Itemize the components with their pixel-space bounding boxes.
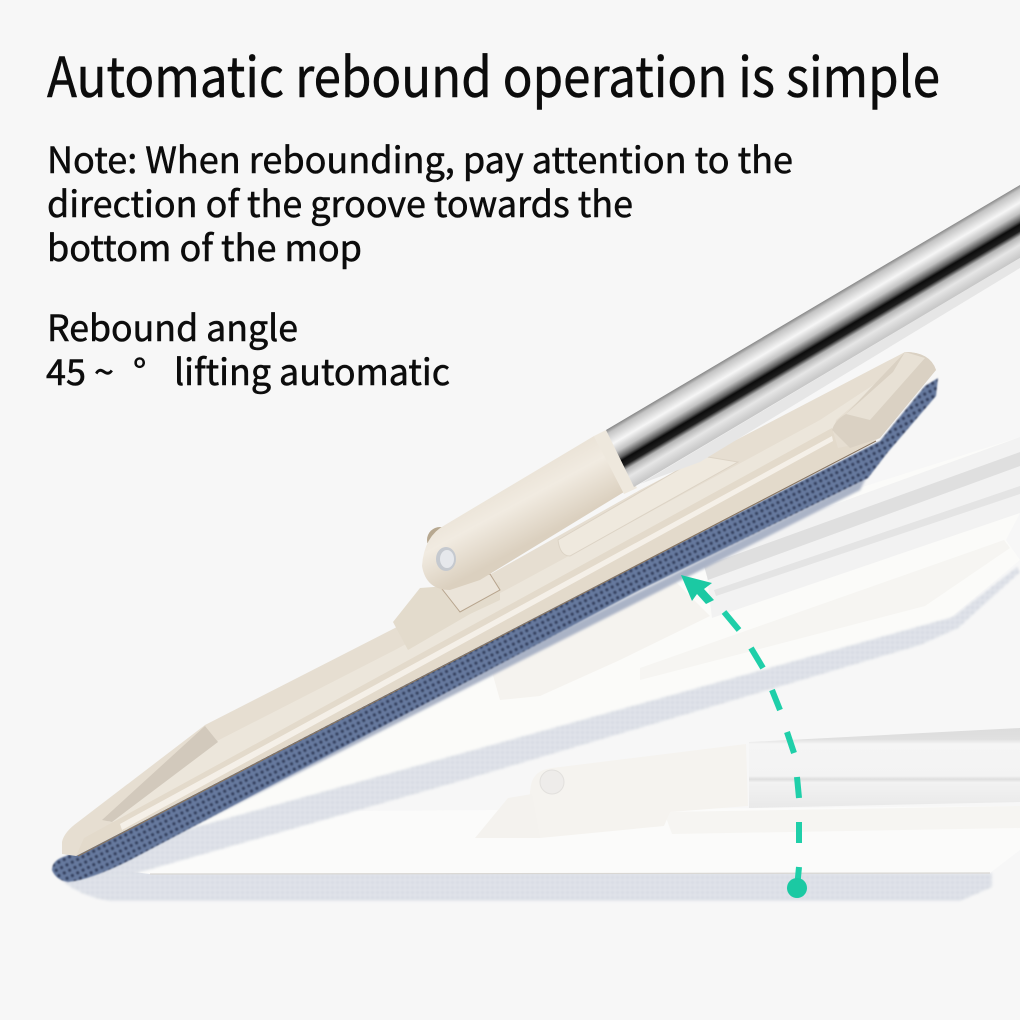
ghost plate middle	[95, 437, 1020, 858]
ghost pole middle	[704, 437, 1020, 618]
arc dashes	[724, 612, 799, 888]
near rail	[76, 428, 876, 856]
rear pivot	[427, 527, 453, 553]
steel pole	[606, 185, 1020, 487]
note text: direction of the groove towards the	[47, 176, 633, 228]
ghost handle low	[530, 744, 748, 838]
rebound angle text	[46, 300, 450, 396]
brown shadow line	[78, 441, 876, 856]
arrowhead	[681, 575, 714, 604]
pad shadow fade	[100, 478, 866, 868]
handle socket	[422, 436, 624, 590]
ghost plate low	[80, 806, 1020, 874]
rotation arrow	[681, 575, 807, 898]
rebound angle text: °	[133, 344, 146, 396]
hinge base	[393, 582, 500, 650]
ghost pad low	[52, 870, 992, 901]
ghost hinge low	[475, 794, 540, 838]
start dot	[787, 878, 807, 898]
handle collar	[594, 430, 637, 494]
sliding clip	[558, 456, 738, 556]
mop pad	[52, 378, 938, 882]
note text: bottom of the mop	[47, 220, 362, 272]
ghost pole low	[749, 728, 1020, 808]
rebound angle text: Rebound angle	[47, 300, 298, 352]
ghost mop: middle position	[70, 437, 1020, 875]
far end cap	[832, 352, 936, 448]
note text	[47, 132, 793, 272]
ghost pad middle	[70, 567, 1020, 875]
main mop	[52, 185, 1020, 882]
mop plate frame	[62, 352, 936, 856]
ghost handle middle	[492, 580, 710, 700]
near end wedge	[102, 726, 218, 822]
hinge pin	[436, 547, 456, 571]
pole reflection	[640, 258, 1020, 484]
ghost recess middle	[640, 540, 1010, 680]
rebound angle text: 45 ~	[46, 344, 114, 396]
rebound angle text: lifting automatic	[174, 344, 450, 396]
title: Automatic rebound operation is simple	[47, 33, 940, 113]
ghost mop: lowest position	[52, 728, 1020, 901]
note text: Note: When rebounding, pay attention to the	[47, 132, 793, 184]
recessed interior	[108, 372, 893, 822]
